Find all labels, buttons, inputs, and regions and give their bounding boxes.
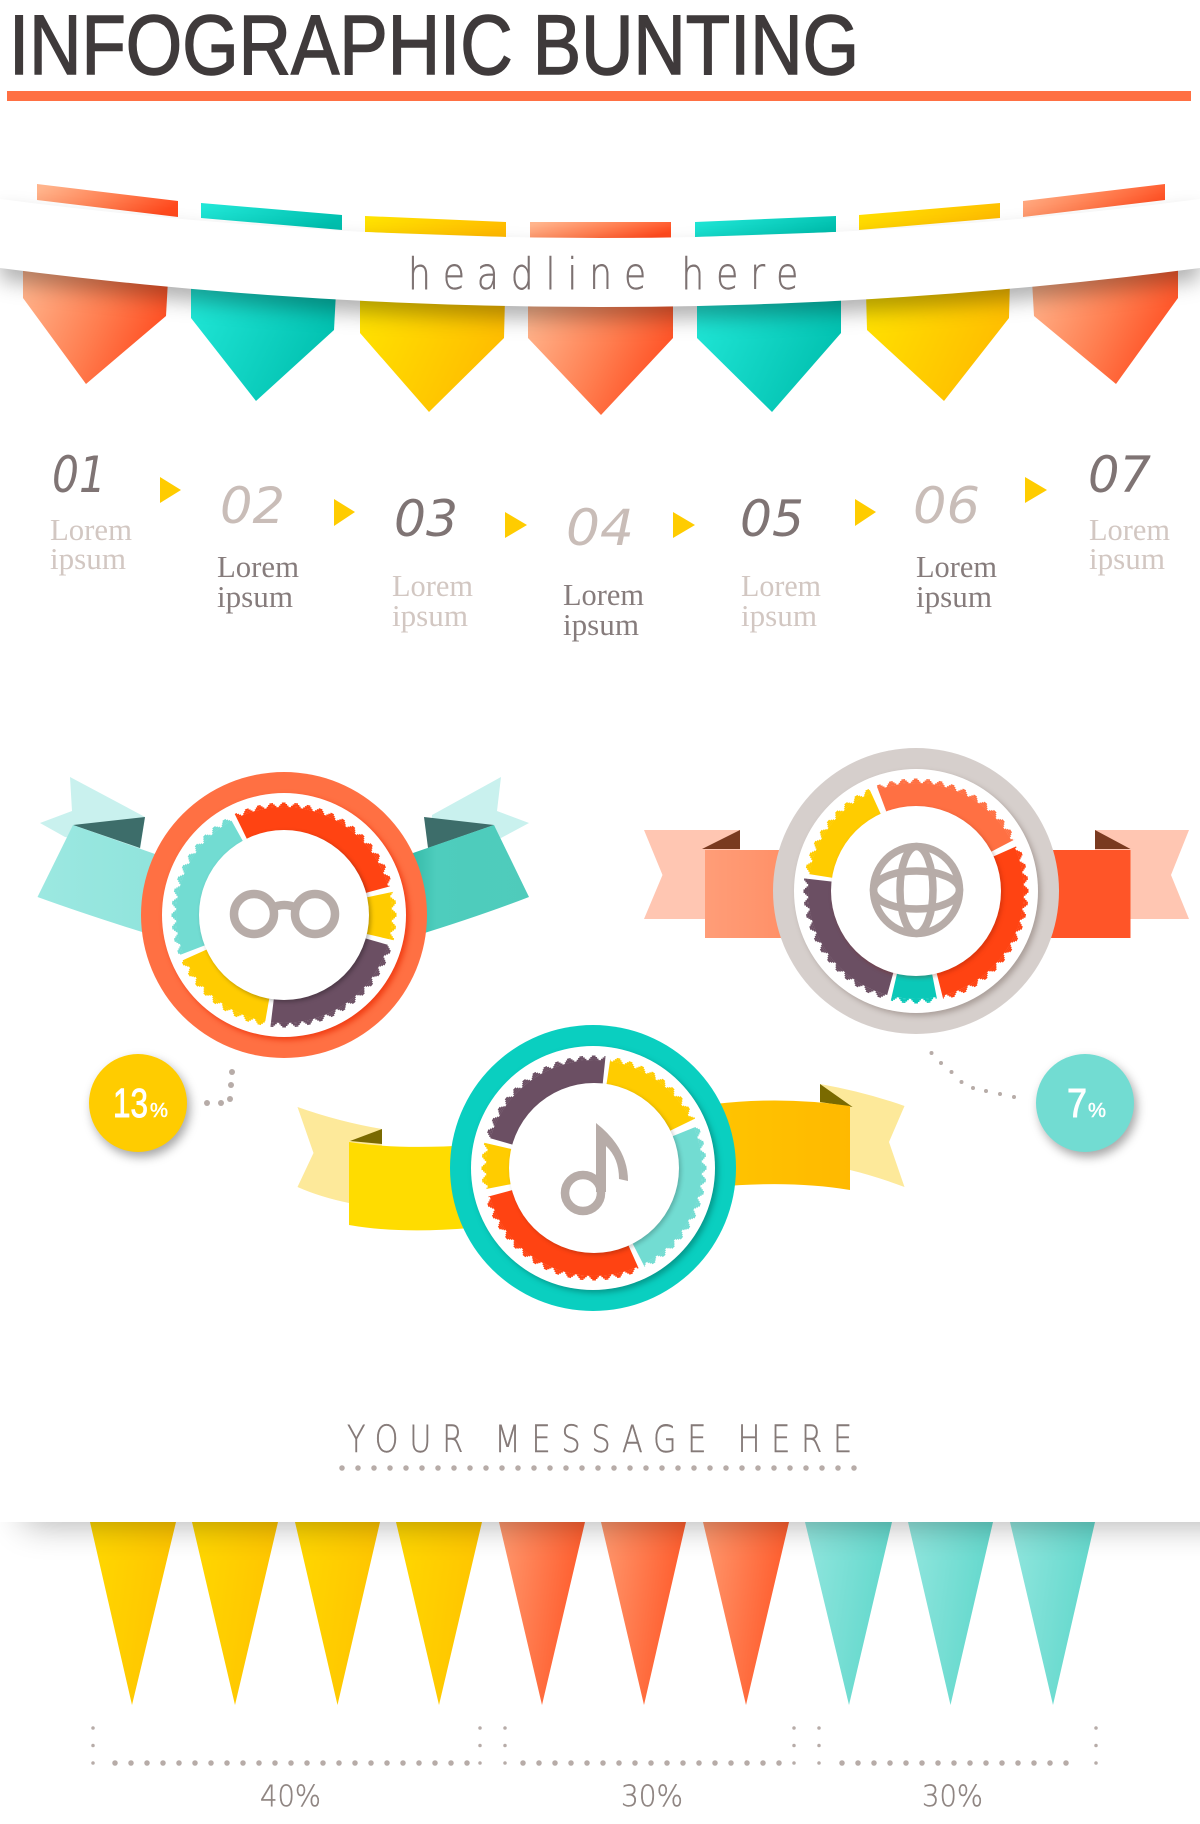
- step 05: Lorem: [741, 568, 821, 603]
- white headline band: [0, 199, 1200, 307]
- ribbon: coral behind grey badge: [644, 830, 1189, 938]
- step 05: [740, 490, 821, 633]
- label 30 percent: 30%: [922, 1779, 983, 1813]
- callout: 13 percent: 13: [113, 1080, 148, 1126]
- step 04: Lorem: [563, 577, 644, 612]
- step 03: 03: [394, 490, 458, 548]
- callout: 13 percent: [89, 1054, 187, 1152]
- message dotted underline: [342, 1465, 857, 1471]
- step 04: [563, 499, 644, 642]
- step 07: [1088, 446, 1170, 576]
- icon: glasses: [234, 894, 335, 934]
- step 03: ipsum: [392, 598, 468, 633]
- step 05: 05: [740, 490, 804, 548]
- step 04: ipsum: [563, 607, 639, 642]
- step 01: ipsum: [50, 541, 126, 576]
- label 40 percent: 40%: [260, 1779, 321, 1813]
- bottom pennants: [90, 1522, 1095, 1705]
- icon: globe: [874, 846, 960, 934]
- lower pennant flags: [23, 262, 1178, 415]
- step 03: [392, 490, 473, 633]
- dotted connector: 13 percent: [204, 1069, 235, 1106]
- callout: 7 percent: %: [1088, 1100, 1106, 1122]
- step 03: Lorem: [392, 568, 473, 603]
- title rule: [7, 91, 1191, 101]
- badge: teal ring with music note: [450, 1025, 736, 1311]
- step 02: ipsum: [217, 579, 293, 614]
- arrow: [334, 499, 355, 526]
- step 02: Lorem: [217, 549, 299, 584]
- label 30 percent: 30%: [621, 1779, 683, 1813]
- dotted connector: 7 percent: [930, 1051, 1016, 1099]
- step 01: Lorem: [50, 512, 132, 547]
- bracket: 40 percent: [93, 1728, 480, 1768]
- segmented ring: [172, 802, 396, 1028]
- step 04: 04: [566, 499, 634, 557]
- badge: orange ring with glasses: [141, 772, 427, 1058]
- arrow: [1025, 477, 1047, 503]
- arrow: [505, 512, 527, 538]
- callout: 7 percent: 7: [1067, 1080, 1087, 1126]
- callout: 7 percent: [1036, 1054, 1134, 1152]
- arrow: [160, 477, 181, 503]
- upper bunting strip: [37, 184, 1165, 238]
- step 07: 07: [1088, 446, 1151, 504]
- arrow: [673, 512, 695, 538]
- ribbon: yellow behind teal badge: [298, 1084, 904, 1230]
- step 07: ipsum: [1089, 541, 1165, 576]
- step 06: [913, 477, 997, 614]
- step 05: ipsum: [741, 598, 817, 633]
- step 02: [217, 477, 299, 614]
- step 07: Lorem: [1089, 512, 1170, 547]
- arrow: [855, 499, 876, 526]
- ribbon: teal behind orange badge: [38, 777, 529, 936]
- badge: grey ring with globe: [773, 748, 1059, 1034]
- title: INFOGRAPHIC BUNTING: [9, 0, 859, 92]
- step 01: [50, 446, 132, 576]
- step 02: 02: [220, 477, 285, 535]
- step 06: 06: [913, 477, 980, 535]
- bracket: 30 percent: [819, 1728, 1096, 1768]
- callout: 13 percent: %: [150, 1100, 168, 1122]
- bracket: 30 percent: [505, 1728, 794, 1768]
- segmented ring: [482, 1056, 706, 1280]
- message text: YOUR MESSAGE HERE: [347, 1418, 852, 1461]
- shadow under message panel: [10, 1522, 1200, 1545]
- segmented ring: [804, 778, 1028, 1004]
- step 06: ipsum: [916, 579, 992, 614]
- step 06: Lorem: [916, 549, 997, 584]
- headline text: headline here: [408, 250, 798, 300]
- step 01: 01: [52, 446, 106, 504]
- icon: music note: [565, 1123, 628, 1211]
